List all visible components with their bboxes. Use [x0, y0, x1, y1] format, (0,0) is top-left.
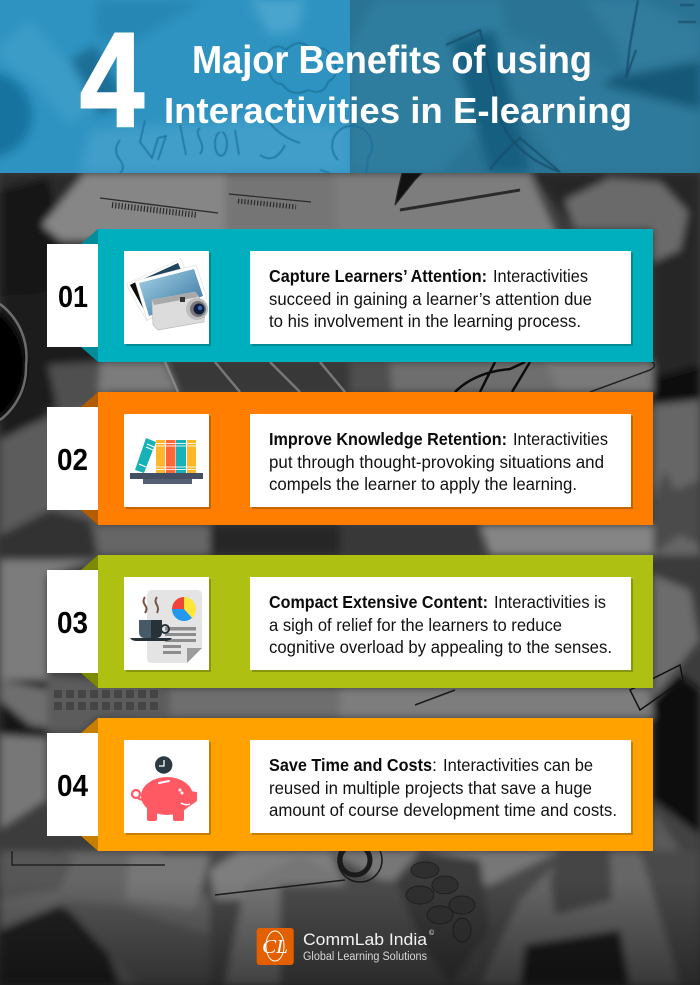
- panel: benefit 01: [47, 229, 653, 362]
- panel: benefit 02: [47, 392, 653, 525]
- number 04: 04: [57, 768, 89, 803]
- logo: CommLab India: ©: [429, 929, 435, 937]
- number 01: [47, 244, 98, 347]
- text block: [250, 251, 633, 346]
- panel: benefit 04: [47, 718, 653, 851]
- title: [164, 39, 632, 131]
- text block: to his involvement in the learning process.: [269, 311, 581, 331]
- text block: compels the learner to apply the learning.: [269, 474, 577, 494]
- icon: logo mark: CL: [262, 936, 288, 958]
- text block: amount of course development time and costs.: [269, 800, 617, 820]
- logo: CommLab India: [257, 928, 435, 965]
- text block: Interactivities can be: [443, 755, 593, 775]
- text block: Save Time and Costs: [269, 755, 432, 775]
- number 03: 03: [57, 605, 88, 640]
- number 01: 01: [58, 279, 88, 314]
- text block: a sigh of relief for the learners to reduce: [269, 615, 562, 635]
- text block: [250, 740, 633, 835]
- header right panel: [350, 0, 700, 173]
- icon: coffee and document: [124, 577, 211, 672]
- logo: CommLab India: Global Learning Solutions: [303, 951, 427, 963]
- text block: Interactivities: [513, 429, 608, 449]
- icon: books on shelf: [124, 414, 211, 509]
- text block: [250, 577, 633, 672]
- text block: cognitive overload by appealing to the senses.: [269, 637, 612, 657]
- header banner: [0, 0, 700, 173]
- numeral 4: 4: [80, 6, 144, 155]
- text block: Capture Learners’ Attention:: [269, 266, 487, 286]
- number 04: [47, 733, 98, 836]
- panel: benefit 03: [47, 555, 653, 688]
- title: Major Benefits of using: [192, 39, 592, 82]
- number 02: [47, 407, 98, 510]
- text block: Interactivities: [493, 266, 588, 286]
- number 02: 02: [57, 442, 88, 477]
- title: Interactivities in E-learning: [164, 90, 632, 131]
- icon: piggy bank with clock: [124, 740, 211, 835]
- text block: Compact Extensive Content:: [269, 592, 488, 612]
- text block: Interactivities is: [494, 592, 606, 612]
- text block: put through thought-provoking situations and: [269, 452, 604, 472]
- text block: Improve Knowledge Retention:: [269, 429, 507, 449]
- text block: :: [432, 755, 437, 775]
- icon: logo mark: [257, 928, 294, 965]
- text block: [250, 414, 633, 509]
- icon: camera and photos: [124, 251, 211, 346]
- number 03: [47, 570, 98, 673]
- header left panel: [0, 0, 350, 173]
- text block: succeed in gaining a learner’s attention due: [269, 289, 592, 309]
- logo: CommLab India: CommLab India: [303, 930, 428, 949]
- text block: reused in multiple projects that save a huge: [269, 778, 592, 798]
